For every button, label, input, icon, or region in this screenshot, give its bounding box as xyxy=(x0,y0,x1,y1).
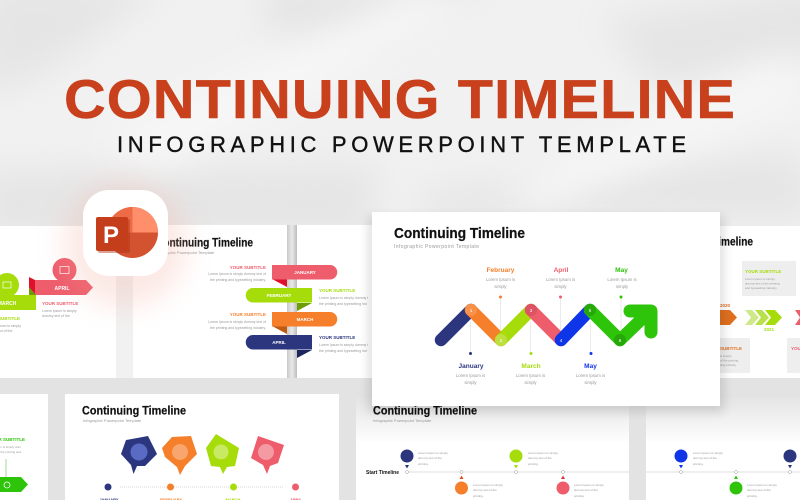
label: April: simply xyxy=(554,284,567,289)
title: CONTINUING TIMELINE xyxy=(64,68,735,130)
box: bottom note left xyxy=(715,338,750,373)
box: top note xyxy=(742,261,796,296)
box: bottom note right xyxy=(787,338,800,373)
milestone: navy: dummy text of the xyxy=(418,456,442,460)
pin: January xyxy=(121,436,157,474)
shadow under main slide xyxy=(368,216,724,412)
milestone: orange: Lorem Ipsum is simply xyxy=(473,483,503,487)
slide heading: Continuing Timeline xyxy=(373,406,477,418)
text: February note: YOUR SUBTITLE xyxy=(319,288,355,293)
text: April subtitle: YOUR SUBTITLE xyxy=(42,301,78,306)
arrows: green chevrons xyxy=(745,310,782,325)
milestone: coral: Lorem Ipsum is simply xyxy=(574,483,604,487)
label: April: Lorem Ipsum is xyxy=(546,277,575,282)
label: January xyxy=(456,352,485,385)
timeline node: April xyxy=(290,484,303,500)
slide heading: Infographic Powerpoint Template xyxy=(156,250,215,255)
text: January note xyxy=(208,265,266,282)
banner: April: APRIL xyxy=(272,340,286,345)
icon: PowerPoint app xyxy=(63,183,187,307)
pin: February xyxy=(162,436,197,475)
pin: April xyxy=(251,436,284,474)
slide heading xyxy=(394,225,525,250)
label: February: simply xyxy=(494,284,507,289)
label: January: January xyxy=(459,363,484,370)
banner: February xyxy=(246,288,312,311)
milestone: green xyxy=(730,470,777,498)
label: 2020: 2020 xyxy=(720,303,731,308)
segment: January xyxy=(441,310,471,340)
box: top note: Lorem Ipsum is simply xyxy=(745,277,775,281)
box: bottom note left: SUBTITLE xyxy=(720,346,742,351)
banner: January: JANUARY xyxy=(294,270,316,275)
slide: left cropped arrows xyxy=(0,226,116,378)
pole xyxy=(287,225,297,378)
box: top note: YOUR SUBTITLE xyxy=(745,269,781,274)
milestone: navy xyxy=(400,450,448,474)
banner: January xyxy=(272,265,337,287)
banner: April: APRIL xyxy=(54,286,70,292)
text: April note: the printing and typesetting ind xyxy=(319,349,367,353)
segment: March xyxy=(501,310,531,340)
box: bottom note left: is simply xyxy=(720,354,732,358)
step numbers: 6 xyxy=(619,338,622,343)
text: February note: Lorem Ipsum is simply dummy t xyxy=(319,296,368,300)
milestone: green: Lorem Ipsum is simply xyxy=(747,483,777,487)
arrow: orange xyxy=(720,310,737,325)
slide heading: Continuing Timeline xyxy=(156,238,253,250)
subtitle: INFOGRAPHIC POWERPOINT TEMPLATE xyxy=(117,132,686,157)
text: February note: the printing and typesetting ind xyxy=(319,302,367,306)
slide: bottom pentagon pins xyxy=(65,394,339,500)
box: top note: and typesetting industry. xyxy=(745,286,777,290)
text: March subtitle xyxy=(0,316,21,333)
banner: March xyxy=(0,273,36,310)
slide: bottom-left cropped: the printing and xyxy=(0,450,21,454)
label: May blue: simply xyxy=(584,380,597,385)
slide: right cropped yearly arrows xyxy=(656,226,800,378)
banner: February: FEBRUARY xyxy=(267,293,291,298)
slide: bottom right timeline xyxy=(646,394,800,500)
slide: bottom-left cropped xyxy=(0,394,48,500)
label: May blue: May xyxy=(584,363,597,370)
text: April note: YOUR SUBTITLE xyxy=(319,335,355,340)
label: February: February xyxy=(487,267,515,274)
icon: PowerPoint app: P xyxy=(103,222,119,249)
slide heading: Continuing Timeline xyxy=(656,236,753,248)
slide heading xyxy=(156,238,253,255)
banner: April xyxy=(246,335,312,358)
label: May blue xyxy=(576,352,605,385)
segment: May green xyxy=(590,310,620,340)
milestone: navy: Lorem Ipsum is simply xyxy=(418,451,448,455)
box: bottom note left: of the printing xyxy=(720,358,739,362)
milestone: coral xyxy=(556,470,604,498)
label: January: Lorem Ipsum is xyxy=(456,373,485,378)
label: April xyxy=(546,267,575,298)
slide heading: Infographic Powerpoint Template xyxy=(83,418,142,423)
slide heading xyxy=(373,406,477,423)
text: April subtitle: dummy text of the xyxy=(42,314,70,318)
text: April note xyxy=(319,335,368,353)
label: May green xyxy=(607,267,637,298)
label: May green: Lorem Ipsum is xyxy=(607,277,637,282)
milestone: navy: printing. xyxy=(418,462,429,466)
text: February note xyxy=(319,288,368,306)
label: April: April xyxy=(554,267,569,274)
segment: April xyxy=(531,310,561,340)
label: start timeline: Start Timeline xyxy=(366,470,399,476)
milestone: coral: dummy text of the xyxy=(574,488,598,492)
step numbers: 1 xyxy=(470,308,473,313)
text: April subtitle xyxy=(42,301,78,318)
dotted timeline xyxy=(120,486,283,488)
step numbers: 4 xyxy=(560,338,563,343)
slide: vertical pole timeline xyxy=(133,225,372,378)
label: March: simply xyxy=(524,380,537,385)
text: March note: the printing and typesetting industry. xyxy=(210,326,266,330)
slide heading xyxy=(82,406,186,423)
text: April subtitle: Lorem ipsum is simply xyxy=(42,309,77,313)
label: March: Lorem Ipsum is xyxy=(516,373,545,378)
slide heading: Infographic Powerpoint Template xyxy=(373,418,432,423)
step numbers: 5 xyxy=(589,308,592,313)
label: March: March xyxy=(521,363,541,370)
segment: February xyxy=(471,310,501,340)
arrow: pink xyxy=(795,310,800,325)
step numbers xyxy=(465,304,626,346)
milestone: coral: printing. xyxy=(574,494,585,498)
banner: April xyxy=(29,258,93,295)
text: March note xyxy=(208,312,266,330)
connector lines xyxy=(470,298,621,353)
milestone: blue xyxy=(674,450,723,474)
text: January note: Lorem Ipsum is simply dummy text of xyxy=(208,272,266,276)
label: March xyxy=(516,352,545,385)
slide heading: Continuing Timeline xyxy=(394,225,525,242)
milestone: green: dummy text of the xyxy=(747,488,771,492)
timeline line xyxy=(407,471,629,473)
box: bottom note left: ting industry. xyxy=(720,363,737,367)
banner: March xyxy=(272,312,337,334)
slide: main continuing timeline xyxy=(372,212,720,406)
timeline node: February xyxy=(160,484,182,500)
timeline node: January xyxy=(99,484,119,500)
slide heading: Continuing Timeline xyxy=(82,406,186,418)
text: January note: the printing and typesetting industry. xyxy=(210,278,266,282)
milestone: lime: dummy text of the xyxy=(528,456,552,460)
label: February xyxy=(486,267,515,298)
label: January: simply xyxy=(464,380,477,385)
label: May blue: Lorem Ipsum is xyxy=(576,373,605,378)
milestone: blue: printing. xyxy=(693,462,704,466)
arrow: up right xyxy=(620,311,651,340)
milestone: orange xyxy=(455,470,503,498)
text: January note: YOUR SUBTITLE xyxy=(230,265,266,270)
milestone: green: printing. xyxy=(747,494,758,498)
pin: March xyxy=(206,434,239,474)
label: May green: May xyxy=(615,267,628,274)
slide: bottom start timeline xyxy=(356,394,629,500)
step numbers: 2 xyxy=(500,338,503,343)
milestone: navy xyxy=(784,450,796,474)
banner: March: MARCH xyxy=(297,317,313,322)
milestone: lime: Lorem Ipsum is simply xyxy=(528,451,558,455)
slide heading: Infographic Powerpoint Template xyxy=(394,244,479,250)
text: March note: YOUR SUBTITLE xyxy=(230,312,266,317)
text: March note: Lorem Ipsum is simply dummy text of xyxy=(208,320,266,324)
text: April note: Lorem Ipsum is simply dummy t xyxy=(319,343,368,347)
milestone: orange: printing. xyxy=(473,494,484,498)
timeline line xyxy=(646,471,800,473)
milestone: blue: dummy text of the xyxy=(693,456,717,460)
milestone: blue: Lorem Ipsum is simply xyxy=(693,451,723,455)
step numbers: 3 xyxy=(530,308,533,313)
label: May green: simply xyxy=(616,284,629,289)
milestone: lime xyxy=(510,450,558,474)
box: top note: dummy text of the printing xyxy=(745,282,780,286)
milestone: orange: dummy text of the xyxy=(473,488,497,492)
label: February: Lorem Ipsum is xyxy=(486,277,515,282)
timeline node: March xyxy=(226,484,241,500)
segment: May blue xyxy=(561,310,590,340)
label: 2021: 2021 xyxy=(764,327,775,332)
milestone: lime: printing. xyxy=(528,462,539,466)
zigzag chart xyxy=(441,310,651,340)
